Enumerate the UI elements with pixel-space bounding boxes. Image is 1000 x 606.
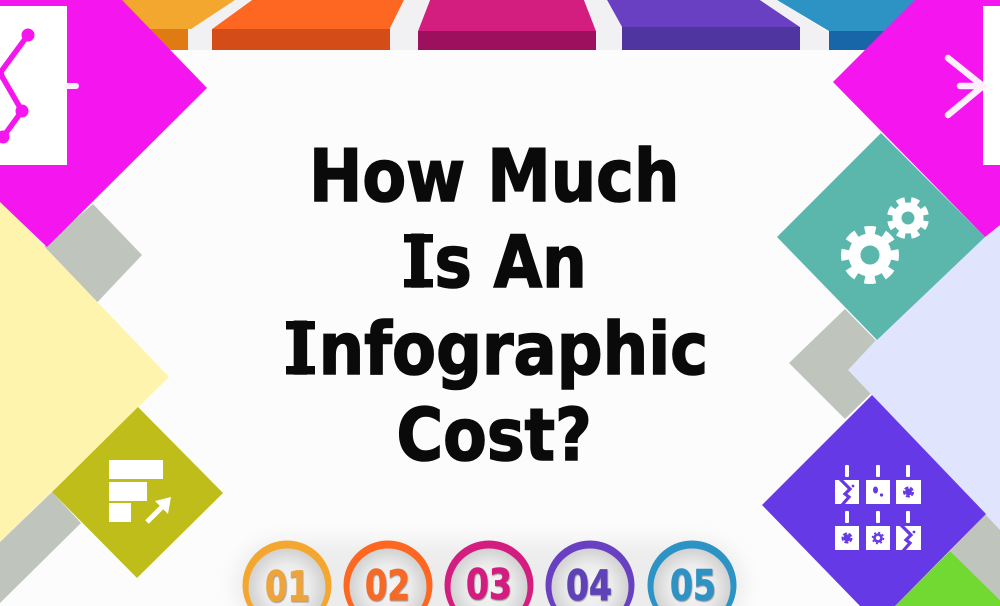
title: Infographic: [288, 309, 708, 392]
ribbon 03 crimson: [418, 0, 596, 50]
panel: left magenta diamond: [0, 0, 207, 247]
letter I serifs: [286, 234, 433, 374]
title: How Much: [309, 135, 679, 219]
top ribbon band: [110, 0, 930, 50]
grey connector strips: [0, 204, 1000, 603]
icon: bars with rising arrow: [109, 460, 171, 522]
panel: right magenta diamond: [833, 0, 1000, 237]
ribbon separators: [188, 0, 829, 50]
badge 03: [444, 540, 534, 606]
badge 05: [648, 540, 736, 606]
badge shadow: [235, 540, 745, 606]
title: Is An: [406, 220, 587, 304]
numbered badges: [235, 540, 745, 606]
panel: teal diamond with gears: [777, 133, 985, 340]
badge 04: [546, 540, 634, 606]
panel: violet diamond with tiles: [762, 395, 986, 606]
badge 02: [344, 540, 432, 606]
panel: olive diamond with bar chart: [52, 407, 223, 578]
ribbon 02 orange: [212, 0, 404, 50]
icon: large gear: [846, 230, 894, 280]
icon: small gear: [885, 195, 931, 241]
ribbon 05 blue: [777, 0, 930, 50]
ribbon 01 amber: [110, 0, 235, 50]
title: Cost?: [396, 394, 592, 478]
white card with line chart icon: [0, 6, 76, 165]
icon: hanging tile grid: [835, 465, 921, 551]
badge 01: [242, 540, 332, 606]
panel: lavender diamond: [848, 221, 1000, 530]
title: [286, 135, 708, 478]
panel: pale yellow diamond: [0, 200, 169, 542]
panel: green diamond: [895, 551, 1000, 606]
ribbon 04 purple: [607, 0, 800, 50]
white card with arrow icon: [948, 6, 1000, 165]
